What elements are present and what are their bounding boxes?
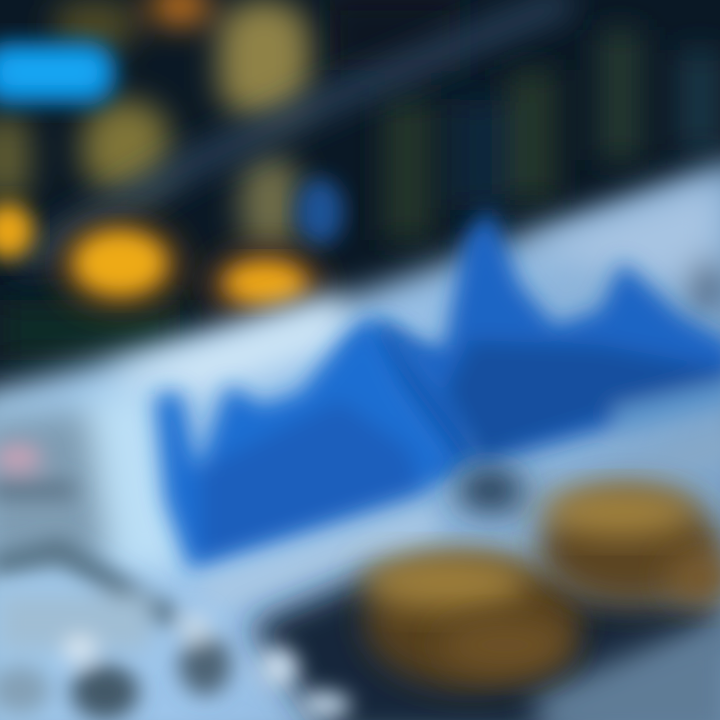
panel: lower paper strip [190,425,720,610]
chart: right blue mountain area [378,208,720,465]
panel: light paper surface [0,155,720,720]
panel: lower left blurred table rows [0,444,351,720]
glow: olive column blobs [0,0,310,250]
panel: lower right paper [530,612,720,720]
background: dark teal vertical bands [0,0,720,360]
icon: blue glow spot [296,178,344,246]
icon: cyan pill light [0,42,116,104]
panel: soft shading on paper [0,180,720,570]
chart: blue area bridge between mountains [350,320,480,470]
chart: left blue mountain area [155,315,462,570]
icon: yellow lights [0,203,323,318]
icon: stacked gold coins [361,488,720,688]
line: blurred diagonal chart line [20,0,570,262]
panel: dark shadow under coins [250,468,720,720]
